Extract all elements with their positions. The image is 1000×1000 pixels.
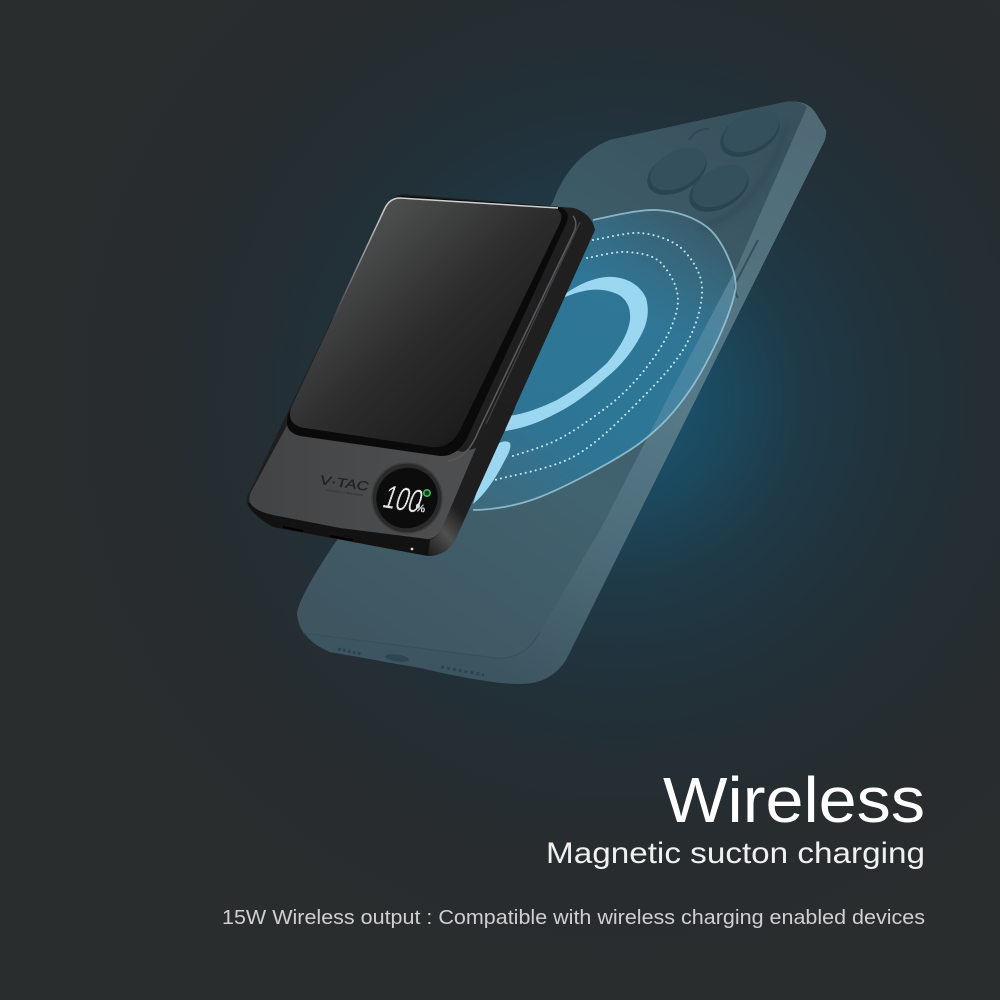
side button bbox=[735, 240, 758, 298]
grey lower panel bbox=[249, 420, 476, 539]
corner highlight bbox=[428, 400, 515, 556]
pad highlight left bbox=[330, 208, 385, 325]
lens 1 bbox=[640, 139, 714, 204]
lens 2 bbox=[713, 101, 787, 166]
bottom dark edge bbox=[247, 503, 430, 556]
charging field disc bbox=[469, 211, 734, 510]
speaker and port bbox=[338, 649, 484, 675]
lens 3 bbox=[682, 156, 756, 221]
camera lenses bbox=[640, 101, 787, 221]
bottom edge line bbox=[303, 632, 540, 658]
outer shell bbox=[246, 194, 595, 556]
phone bbox=[297, 101, 826, 684]
lens 3 top bbox=[685, 156, 755, 216]
magnetic pad top bbox=[290, 198, 561, 447]
percent sign: % bbox=[415, 502, 426, 516]
dotted ring inner bbox=[510, 252, 678, 457]
USB port 1 bbox=[283, 527, 303, 531]
phone back face bbox=[297, 102, 807, 657]
logo text: V·TAC bbox=[318, 472, 371, 494]
lens 3 shadow bbox=[682, 157, 756, 221]
charging port bbox=[385, 653, 409, 663]
display bbox=[365, 457, 449, 539]
subheading: Magnetic sucton charging bbox=[546, 837, 925, 870]
brand logo bbox=[318, 472, 371, 497]
light blue ring lower segment bbox=[473, 441, 510, 504]
lower side button bbox=[640, 393, 688, 477]
phone edge showing through the field bbox=[649, 274, 734, 434]
heading: Wireless: Wireless bbox=[663, 764, 925, 836]
dotted ring outer bbox=[495, 233, 702, 480]
pad edge trim second bbox=[486, 222, 580, 424]
power bank bbox=[246, 194, 595, 556]
USB port 2 bbox=[330, 536, 353, 540]
magnetic pad base bbox=[287, 196, 568, 456]
lens 2 top bbox=[716, 101, 786, 161]
display digits: 100 bbox=[378, 479, 428, 521]
phone side edge bbox=[297, 101, 826, 684]
lens 1 top bbox=[643, 139, 713, 199]
lens 2 shadow bbox=[713, 102, 787, 166]
left speaker bbox=[338, 649, 362, 654]
logo tagline: Innovation in Illumination bbox=[326, 488, 363, 497]
camera island shading bbox=[700, 122, 788, 228]
description: 15W Wireless output : Compatible with wireless charging enabled devices bbox=[222, 907, 925, 929]
flash bbox=[689, 129, 709, 140]
indicator LED bbox=[411, 548, 413, 550]
lens 1 shadow bbox=[640, 140, 714, 204]
pad edge trim bbox=[448, 216, 576, 461]
pad highlight top bbox=[385, 198, 558, 208]
thin outer ring bbox=[473, 210, 736, 510]
right speaker bbox=[441, 667, 484, 675]
light blue magnetic ring bbox=[505, 277, 648, 431]
display bezel bbox=[372, 463, 442, 533]
display face bbox=[365, 457, 449, 539]
charging indicator bbox=[424, 490, 430, 496]
